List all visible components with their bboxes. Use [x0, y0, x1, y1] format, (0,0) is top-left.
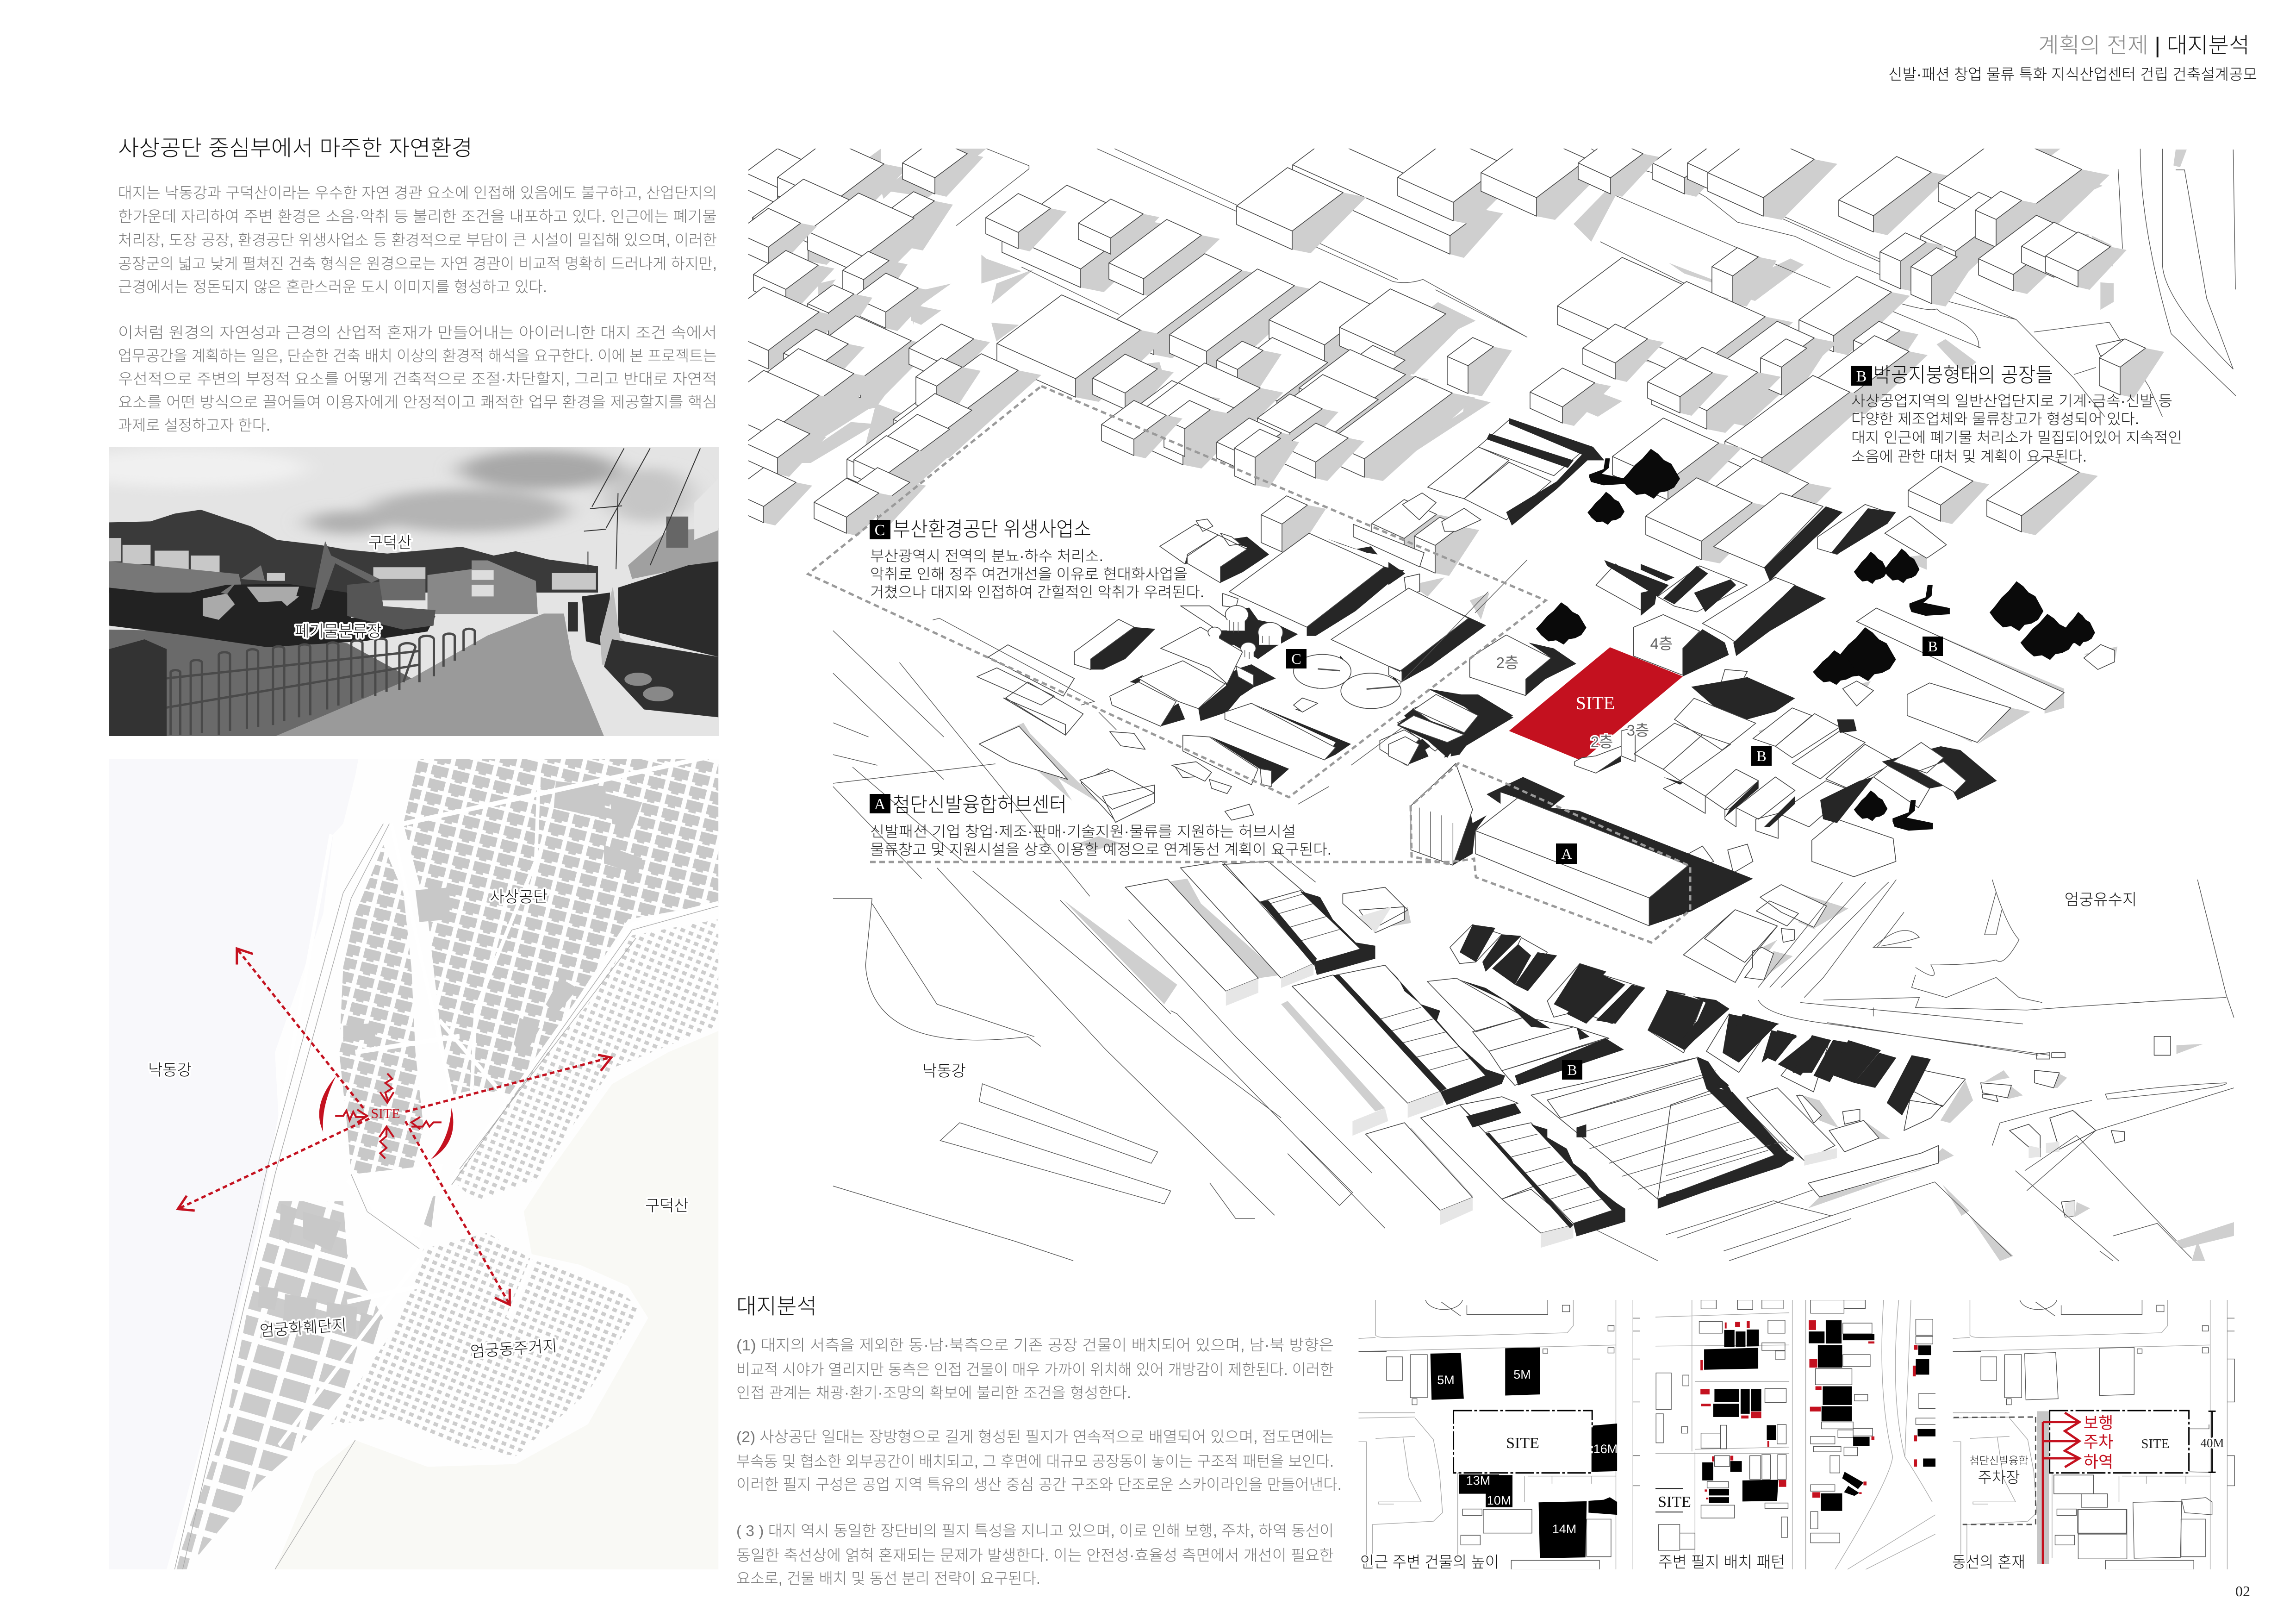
site label: SITE [2141, 1437, 2170, 1451]
item 1: (1) 대지의 서측을 제외한 동·남·북측으로 기존 공장 건물이 배치되어 있으며, 남·북 방향은 [736, 1337, 1334, 1354]
item 2: 이러한 필지 구성은 공업 지역 특유의 생산 중심 공간 구조와 단조로운 스카이라인을 만들어낸다. [736, 1476, 1342, 1493]
marker C: C [1291, 650, 1301, 667]
item 1 [736, 1337, 1334, 1401]
marker A: A [1561, 845, 1572, 862]
context map [109, 755, 719, 1570]
item 2 [736, 1428, 1342, 1493]
callout A title: 첨단신발융합허브센터 [893, 793, 1067, 816]
heading: 대지분석 [736, 1294, 817, 1318]
place label 엄궁유수지: 엄궁유수지 [2065, 891, 2137, 909]
paragraph 2 [118, 324, 717, 434]
floor label 4층: 4층 [1650, 635, 1673, 652]
map label: 구덕산: 구덕산 [645, 1197, 689, 1215]
site photo [66, 447, 719, 737]
north-east ground shadows and road lines [1574, 149, 2238, 417]
floor label 2층 south: 2층 [1591, 733, 1613, 750]
marker B center [1751, 746, 1772, 766]
plan 1: surrounding building heights [1358, 1300, 1640, 1570]
map label: 낙동강: 낙동강 [148, 1062, 192, 1079]
plan 3 caption: 동선의 혼재 [1952, 1554, 2025, 1571]
south-east factories and reservoir [1666, 880, 2234, 1261]
item 1: 비교적 시야가 열리지만 동측은 인접 건물이 매우 가까이 위치해 있어 개방감이 제한된다. 이러한 [736, 1361, 1334, 1378]
zone boundary C [808, 386, 1546, 797]
site label: SITE [1576, 693, 1615, 713]
marker C [1286, 649, 1307, 668]
marker B north [1923, 637, 1943, 656]
building fabric [174, 755, 718, 1569]
height label 40M: 40M [2200, 1436, 2224, 1450]
roads over fabric [174, 755, 718, 1569]
bottom text: site analysis [736, 1294, 1342, 1587]
site label: SITE [1658, 1493, 1691, 1511]
parking label: 주차장 [1978, 1469, 2020, 1486]
item 2: (2) 사상공단 일대는 장방형으로 길게 형성된 필지가 연속적으로 배열되어 있으며, 접도면에는 [736, 1428, 1334, 1445]
drawing markers and labels [922, 635, 2137, 1080]
paragraph 1: 대지는 낙동강과 구덕산이라는 우수한 자연 경관 요소에 인접해 있음에도 불구하고, 산업단지의 [118, 184, 717, 201]
floor label 3층: 3층 [1627, 722, 1649, 739]
callout A body: 물류창고 및 지원시설을 상호 이용할 예정으로 연계동선 계획이 요구된다. [870, 841, 1332, 858]
paragraph 1: 근경에서는 정돈되지 않은 혼란스러운 도시 이미지를 형성하고 있다. [118, 278, 547, 295]
circulation labels: 주차 [2084, 1433, 2113, 1451]
item 3 [736, 1522, 1334, 1587]
callout A body [870, 823, 1332, 858]
callout B body: 대지 인근에 폐기물 처리소가 밀집되어있어 지속적인 [1851, 429, 2182, 446]
callout B body: 다양한 제조업체와 물류창고가 형성되어 있다. [1851, 411, 2139, 427]
badge A: A [874, 796, 886, 813]
badge A [870, 794, 890, 813]
marker B north: B [1928, 638, 1938, 655]
height labels: 14M [1552, 1522, 1576, 1536]
map label: 사상공단: 사상공단 [490, 888, 548, 906]
badge B: B [1856, 368, 1867, 385]
label: 구덕산: 구덕산 [368, 534, 412, 552]
callout C body [870, 548, 1204, 600]
circulation labels: 보행 [2084, 1414, 2113, 1432]
paragraph 1: 처리장, 도장 공장, 환경공단 위생사업소 등 환경적으로 부담이 큰 시설이 밀집해 있으며, 이러한 [118, 231, 717, 249]
view and noise arrows [178, 949, 611, 1305]
marker B south [1562, 1060, 1582, 1080]
item 1: 인접 관계는 채광·환기·조망의 확보에 불리한 조건을 형성한다. [736, 1384, 1131, 1401]
place label 낙동강: 낙동강 [922, 1062, 966, 1080]
left text: natural environment [118, 136, 717, 434]
item 3: ( 3 ) 대지 역시 동일한 장단비의 필지 특성을 지니고 있으며, 이로 인해 보행, 주차, 하역 동선이 [736, 1522, 1334, 1539]
callout B body: 사상공업지역의 일반산업단지로 기계·금속·신발 등 [1851, 393, 2172, 409]
callout C title: 부산환경공단 위생사업소 [893, 518, 1091, 541]
C zone building group [833, 519, 1527, 903]
map label: 엄궁동주거지: 엄궁동주거지 [470, 1337, 558, 1361]
paragraph 2: 과제로 설정하고자 한다. [118, 417, 270, 434]
plan 1 caption: 인근 주변 건물의 높이 [1360, 1554, 1499, 1571]
marker A [1556, 843, 1577, 864]
mountain area [275, 1031, 718, 1569]
header: section title and project name [1888, 33, 2257, 83]
north-west ground shadows [740, 149, 1527, 463]
callout B title: 박공지붕형태의 공장들 [1873, 364, 2053, 387]
light massing buildings north of the site [713, 134, 2164, 576]
paragraph 1 [118, 184, 717, 295]
plan 3: circulation overlap [1953, 1300, 2234, 1570]
paragraph 1: 한가운데 자리하여 주변 환경은 소음·악취 등 불리한 조건을 내포하고 있다. 인근에는 폐기물 [118, 208, 717, 225]
site label: SITE [1506, 1435, 1539, 1452]
callout B body: 소음에 관한 대처 및 계획이 요구된다. [1851, 448, 2087, 465]
circulation labels: 하역 [2084, 1453, 2113, 1471]
project name: 신발·패션 창업 물류 특화 지식산업센터 건립 건축설계공모 [1888, 66, 2257, 83]
callout C [870, 518, 1204, 600]
item 3: 동일한 축선상에 얽혀 혼재되는 문제가 발생한다. 이는 안전성·효율성 측면에서 개선이 필요한 [736, 1547, 1334, 1564]
heading: 사상공단 중심부에서 마주한 자연환경 [118, 136, 473, 160]
axonometric site drawing [713, 134, 2238, 1261]
marker B center: B [1756, 748, 1767, 764]
height labels [1437, 1368, 1618, 1536]
paragraph 2: 요소를 어떤 방식으로 끌어들여 이용자에게 안정적이고 쾌적한 업무 환경을 제공할지를 핵심 [118, 394, 717, 411]
map label: SITE: SITE [371, 1106, 400, 1121]
item 3: 요소로, 건물 배치 및 동선 분리 전략이 요구된다. [736, 1570, 1040, 1587]
paragraph 1: 공장군의 넓고 낮게 펼쳐진 건축 형식은 원경으로는 자연 경관이 비교적 명확히 드러나게 하지만, [118, 255, 717, 272]
callout C body: 악취로 인해 정주 여건개선을 이유로 현대화사업을 [870, 566, 1188, 582]
river area [109, 755, 359, 1569]
callout C body: 부산광역시 전역의 분뇨·하수 처리소. [870, 548, 1103, 564]
badge B [1851, 366, 1872, 386]
height labels: 16M [1593, 1442, 1618, 1456]
label: 폐기물분류장: 폐기물분류장 [295, 623, 382, 640]
callout C body: 거쳤으나 대지와 인접하여 간헐적인 악취가 우려된다. [870, 584, 1204, 600]
height labels: 13M [1466, 1474, 1490, 1487]
paragraph 2: 이처럼 원경의 자연성과 근경의 산업적 혼재가 만들어내는 아이러니한 대지 조건 속에서 [118, 324, 717, 341]
trees [1536, 449, 2095, 831]
center massing block west of site [1411, 516, 2117, 873]
map label: 엄궁화훼단지: 엄궁화훼단지 [259, 1316, 347, 1340]
page number: 02 [2235, 1583, 2250, 1599]
badge C [870, 520, 890, 539]
zone boundary A and leader [870, 763, 1690, 943]
paragraph 2: 업무공간을 계획하는 일은, 단순한 건축 배치 이상의 환경적 해석을 요구한다. 이에 본 프로젝트는 [118, 347, 717, 364]
badge C: C [875, 522, 885, 539]
item 2: 부속동 및 협소한 외부공간이 배치되고, 그 후면에 대규모 공장동이 놓이는 구조적 패턴을 보인다. [736, 1453, 1334, 1470]
marker B south: B [1567, 1062, 1577, 1078]
floor label 2층: 2층 [1496, 654, 1518, 671]
section title: 계획의 전제 | 대지분석 [2038, 33, 2250, 57]
height labels: 5M [1437, 1373, 1455, 1387]
plan 2: surrounding lot pattern [1655, 1300, 1937, 1570]
south-west factory rows and river park [833, 764, 1851, 1261]
height labels: 10M [1487, 1493, 1511, 1507]
central dark factories, trees and site [1388, 418, 2095, 926]
plan 2 caption: 주변 필지 배치 패턴 [1658, 1554, 1785, 1571]
circulation labels [2084, 1414, 2113, 1471]
parking label small: 첨단신발융합 [1970, 1455, 2028, 1467]
callout A body: 신발패션 기업 창업·제조·판매·기술지원·물류를 지원하는 허브시설 [870, 823, 1296, 840]
callout B [1851, 364, 2182, 465]
callout B body [1851, 393, 2182, 465]
callout A [870, 793, 1332, 858]
paragraph 2: 우선적으로 주변의 부정적 요소를 어떻게 건축적으로 조절·차단할지, 그리고 반대로 자연적 [118, 370, 717, 387]
height labels: 5M [1513, 1368, 1531, 1381]
